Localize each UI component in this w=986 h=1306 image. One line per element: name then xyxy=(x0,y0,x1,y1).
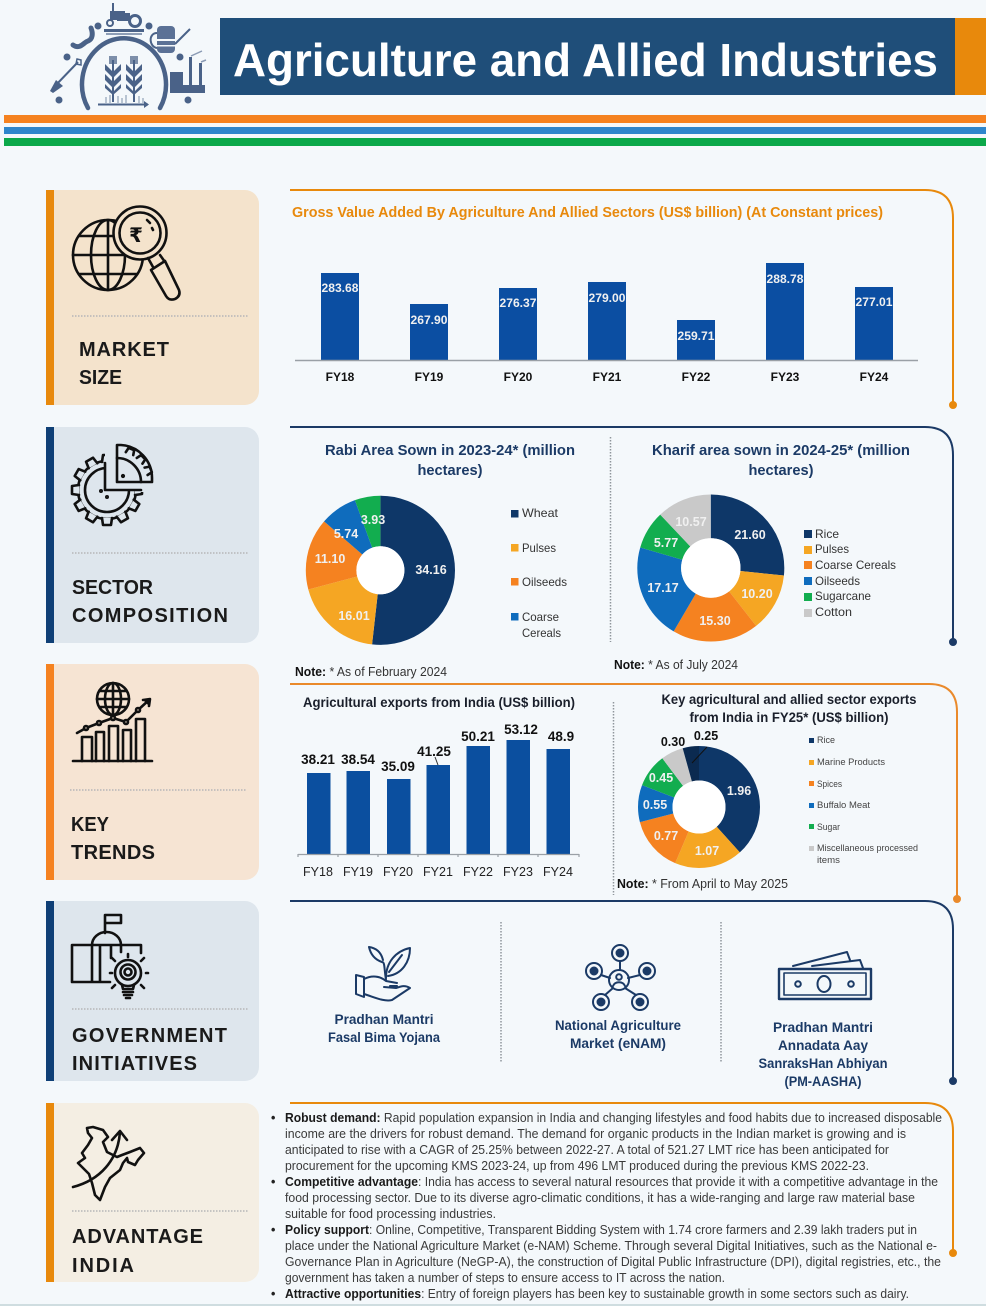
text block: advantage India bullets: Robust demand: Rapid population expansion in India and changing lifestyles and food habits due to increased disposable xyxy=(285,1111,942,1125)
icon: network of connected nodes xyxy=(586,945,655,1010)
legend: Coarse Cereals xyxy=(815,558,896,572)
donut chart: rabi area sown: 16.01 xyxy=(338,609,370,623)
chart title: Agricultural exports from India (US$ billion) xyxy=(303,694,575,710)
bar chart: agricultural exports: 48.9 xyxy=(548,729,574,744)
chart title: Gross Value Added By Agriculture And Allied Sectors (US$ billion) (At Constant prices) xyxy=(292,205,883,221)
text block: advantage India bullets: place under the National Agriculture Market (e-NAM) Scheme. Through several Digital Initiatives, such as the National e- xyxy=(285,1239,937,1253)
donut chart: kharif area sown: 10.57 xyxy=(675,515,707,529)
bar chart: gross value added xyxy=(292,205,918,384)
panel heading: advantage India: ADVANTAGE xyxy=(72,1226,203,1248)
icon: globe with magnifying glass xyxy=(73,206,180,300)
bar chart: gross value added: 267.90 xyxy=(410,313,448,327)
legend: Pulses xyxy=(522,541,556,555)
panel heading: government initiatives xyxy=(72,1025,227,1075)
bar chart: gross value added: 283.68 xyxy=(322,281,359,295)
panel heading: sector composition: SECTOR xyxy=(72,577,154,599)
panel heading: sector composition xyxy=(72,577,228,627)
bar chart: agricultural exports: FY20 xyxy=(383,865,413,879)
donut chart: key exports FY25: 1.96 xyxy=(727,784,751,798)
panel: advantage India xyxy=(46,1103,259,1282)
donut chart: key exports FY25: 0.45 xyxy=(649,771,673,785)
chart title: hectares) xyxy=(418,463,483,479)
icon: banknotes xyxy=(779,952,871,999)
chart title xyxy=(325,443,575,479)
legend: Oilseeds xyxy=(522,575,567,589)
text block: advantage India bullets xyxy=(271,1111,942,1301)
text block: advantage India bullets: food processing sector. Due to its diverse agro-climatic conditions, it has a wide-ranging and large raw material base xyxy=(285,1191,915,1205)
legend: Cereals xyxy=(522,626,561,640)
text block: advantage India bullets: • xyxy=(271,1111,275,1125)
bracket: advantage India xyxy=(290,1103,956,1256)
bar chart: agricultural exports: FY22 xyxy=(463,865,493,879)
note: Note: * From April to May 2025 xyxy=(617,877,788,891)
initiative name xyxy=(555,1018,681,1051)
panel heading: sector composition: COMPOSITION xyxy=(72,605,228,627)
initiative name: Fasal Bima Yojana xyxy=(328,1030,440,1045)
bar chart: agricultural exports: 38.54 xyxy=(341,752,375,767)
bar chart: gross value added: FY20 xyxy=(504,370,533,384)
donut chart: key exports FY25 xyxy=(617,691,918,891)
legend: Sugar xyxy=(817,822,840,832)
panel heading: market size: SIZE xyxy=(79,367,122,389)
bar chart: gross value added: 288.78 xyxy=(766,272,804,286)
bar chart: gross value added: FY19 xyxy=(415,370,444,384)
initiative name: SanraksHan Abhiyan xyxy=(758,1056,888,1071)
donut chart: key exports FY25: 0.55 xyxy=(643,798,667,812)
initiative: National Agriculture Market xyxy=(555,945,681,1051)
text block: advantage India bullets: income are the drivers for robust demand. The demand for organic products in the Indian market is growing and is xyxy=(285,1127,906,1141)
bar chart: agricultural exports: FY24 xyxy=(543,865,573,879)
initiative name: Pradhan Mantri xyxy=(773,1020,873,1035)
icon: globe over rising bars xyxy=(73,683,152,761)
icon: India map with rising arrow xyxy=(73,1127,144,1200)
bracket: market size xyxy=(290,190,956,408)
bar chart: agricultural exports: FY19 xyxy=(343,865,373,879)
initiative name: National Agriculture xyxy=(555,1018,681,1033)
legend: Pulses xyxy=(815,542,849,556)
panel heading: key trends: KEY xyxy=(71,814,110,836)
bar chart: agricultural exports: 38.21 xyxy=(301,752,335,767)
initiative: Pradhan Mantri Fasal Bima Yojana xyxy=(328,947,440,1045)
bar chart: gross value added: 277.01 xyxy=(856,295,893,309)
text block: advantage India bullets: Policy support: Online, Competitive, Transparent Bidding System with 1.74 crore farmers and 2.39 lakh traders put in xyxy=(285,1223,917,1237)
bracket: key trends xyxy=(290,684,960,902)
donut chart: kharif area sown: 5.77 xyxy=(654,536,678,550)
text block: advantage India bullets: Competitive advantage: India has access to several natural resources that provide it with a competitive advantage in the xyxy=(285,1175,938,1189)
initiative: PM-AASHA xyxy=(758,952,888,1089)
text block: advantage India bullets: Governance Plan in Agriculture (NeGP-A), the construction of Digital Public Infrastructure (DPI), digital registries, etc., the xyxy=(285,1255,941,1269)
donut chart: rabi area sown xyxy=(295,443,575,679)
bracket: sector composition xyxy=(290,427,956,645)
legend: Cotton xyxy=(815,605,852,619)
donut chart: rabi area sown: 11.10 xyxy=(315,552,345,566)
donut chart: kharif area sown: 17.17 xyxy=(647,581,679,595)
donut chart: kharif area sown xyxy=(614,443,910,672)
bracket: government initiatives xyxy=(290,901,956,1084)
bar chart: agricultural exports: 53.12 xyxy=(504,722,538,737)
legend: Sugarcane xyxy=(815,589,871,603)
chart title: Kharif area sown in 2024-25* (million xyxy=(652,443,910,459)
chart title: Key agricultural and allied sector exports xyxy=(662,691,917,707)
chart title: from India in FY25* (US$ billion) xyxy=(690,709,888,725)
text block: advantage India bullets: suitable for food processing industries. xyxy=(285,1207,496,1221)
panel heading: government initiatives: GOVERNMENT xyxy=(72,1025,227,1047)
initiative name: Market (eNAM) xyxy=(570,1036,666,1051)
text block: advantage India bullets: • xyxy=(271,1223,275,1237)
text block: advantage India bullets: Attractive opportunities: Entry of foreign players has been key to sustainable growth in some sectors such as dairy. xyxy=(285,1287,909,1301)
text block: advantage India bullets: • xyxy=(271,1175,275,1189)
bar chart: agricultural exports: 50.21 xyxy=(461,729,495,744)
text block: advantage India bullets: anticipated to rise with a CAGR of 25.25% between 2022-27. A total of 521.27 LMT rice has been anticipated for xyxy=(285,1143,889,1157)
note: Note: * As of February 2024 xyxy=(295,665,447,679)
panel heading: advantage India: INDIA xyxy=(72,1255,134,1277)
chart title: Rabi Area Sown in 2023-24* (million xyxy=(325,443,575,459)
legend: Miscellaneous processed xyxy=(817,843,918,853)
icon: rupee symbol: ₹ xyxy=(129,223,143,247)
bar chart: gross value added: 279.00 xyxy=(588,291,626,305)
chart title: hectares) xyxy=(748,463,814,479)
legend: Rice xyxy=(815,527,839,541)
legend xyxy=(809,735,918,865)
panel: government initiatives xyxy=(46,901,259,1081)
legend xyxy=(511,506,567,640)
bar chart: gross value added: FY23 xyxy=(771,370,800,384)
donut chart: kharif area sown: 21.60 xyxy=(734,528,766,542)
donut chart: rabi area sown: 3.93 xyxy=(361,513,385,527)
text block: advantage India bullets: government has taken a number of steps to ensure access to IT across the nation. xyxy=(285,1271,725,1285)
panel heading: market size: MARKET xyxy=(79,339,169,361)
bar chart: gross value added: 276.37 xyxy=(500,296,537,310)
legend xyxy=(804,527,896,619)
title banner xyxy=(220,18,986,95)
initiative name: Annadata Aay xyxy=(778,1038,868,1053)
panel heading: market size xyxy=(79,339,169,389)
bar chart: agricultural exports: 41.25 xyxy=(417,744,451,759)
initiative name xyxy=(758,1020,888,1089)
legend: Oilseeds xyxy=(815,574,860,588)
donut chart: key exports FY25: 1.07 xyxy=(695,844,719,858)
donut chart: kharif area sown: 15.30 xyxy=(699,614,731,628)
panel heading: government initiatives: INITIATIVES xyxy=(72,1053,197,1075)
donut chart: key exports FY25: 0.30 xyxy=(661,735,685,749)
donut chart: key exports FY25: 0.77 xyxy=(654,829,678,843)
panel heading: key trends: TRENDS xyxy=(71,842,155,864)
icon: hand holding plant xyxy=(356,947,410,1000)
panel: sector composition xyxy=(46,427,259,643)
donut chart: kharif area sown: 10.20 xyxy=(741,587,773,601)
bar chart: agricultural exports xyxy=(298,694,579,879)
panel heading: advantage India xyxy=(72,1226,203,1277)
legend: Marine Products xyxy=(817,757,886,767)
donut chart: key exports FY25: 0.25 xyxy=(694,729,718,743)
legend: Spices xyxy=(817,779,842,789)
legend: Coarse xyxy=(522,610,559,624)
panel: key trends xyxy=(46,664,259,880)
panel heading: key trends xyxy=(71,814,155,864)
bar chart: gross value added: FY21 xyxy=(593,370,622,384)
initiative name: Pradhan Mantri xyxy=(334,1012,434,1027)
bar chart: gross value added: FY24 xyxy=(860,370,889,384)
donut chart: rabi area sown: 5.74 xyxy=(334,527,358,541)
text block: advantage India bullets: procurement for the upcoming KMS 2023-24, up from 496 LMT produced during the previous KMS 2022-23. xyxy=(285,1159,869,1173)
bar chart: agricultural exports: FY18 xyxy=(303,865,333,879)
bar chart: agricultural exports: FY23 xyxy=(503,865,533,879)
chart title xyxy=(662,691,917,725)
bar chart: gross value added: FY18 xyxy=(326,370,355,384)
legend: Wheat xyxy=(522,506,559,520)
chart title xyxy=(652,443,910,479)
legend: items xyxy=(817,855,841,865)
panel: market size xyxy=(46,190,259,405)
initiative name: (PM-AASHA) xyxy=(784,1074,862,1089)
legend: Buffalo Meat xyxy=(817,800,871,810)
note: Note: * As of July 2024 xyxy=(614,658,738,672)
donut chart: rabi area sown: 34.16 xyxy=(415,563,447,577)
bar chart: gross value added: 259.71 xyxy=(678,329,715,343)
title banner: Agriculture and Allied Industries xyxy=(233,34,938,86)
legend: Rice xyxy=(817,735,835,745)
initiative name xyxy=(328,1012,440,1045)
header logo: agriculture and industry emblem xyxy=(50,3,206,108)
icon: gear with pie chart xyxy=(72,441,155,525)
bar chart: gross value added: FY22 xyxy=(682,370,711,384)
text block: advantage India bullets: • xyxy=(271,1287,275,1301)
bar chart: agricultural exports: FY21 xyxy=(423,865,453,879)
bar chart: agricultural exports: 35.09 xyxy=(381,759,415,774)
icon: government building and lightbulb xyxy=(72,915,148,998)
